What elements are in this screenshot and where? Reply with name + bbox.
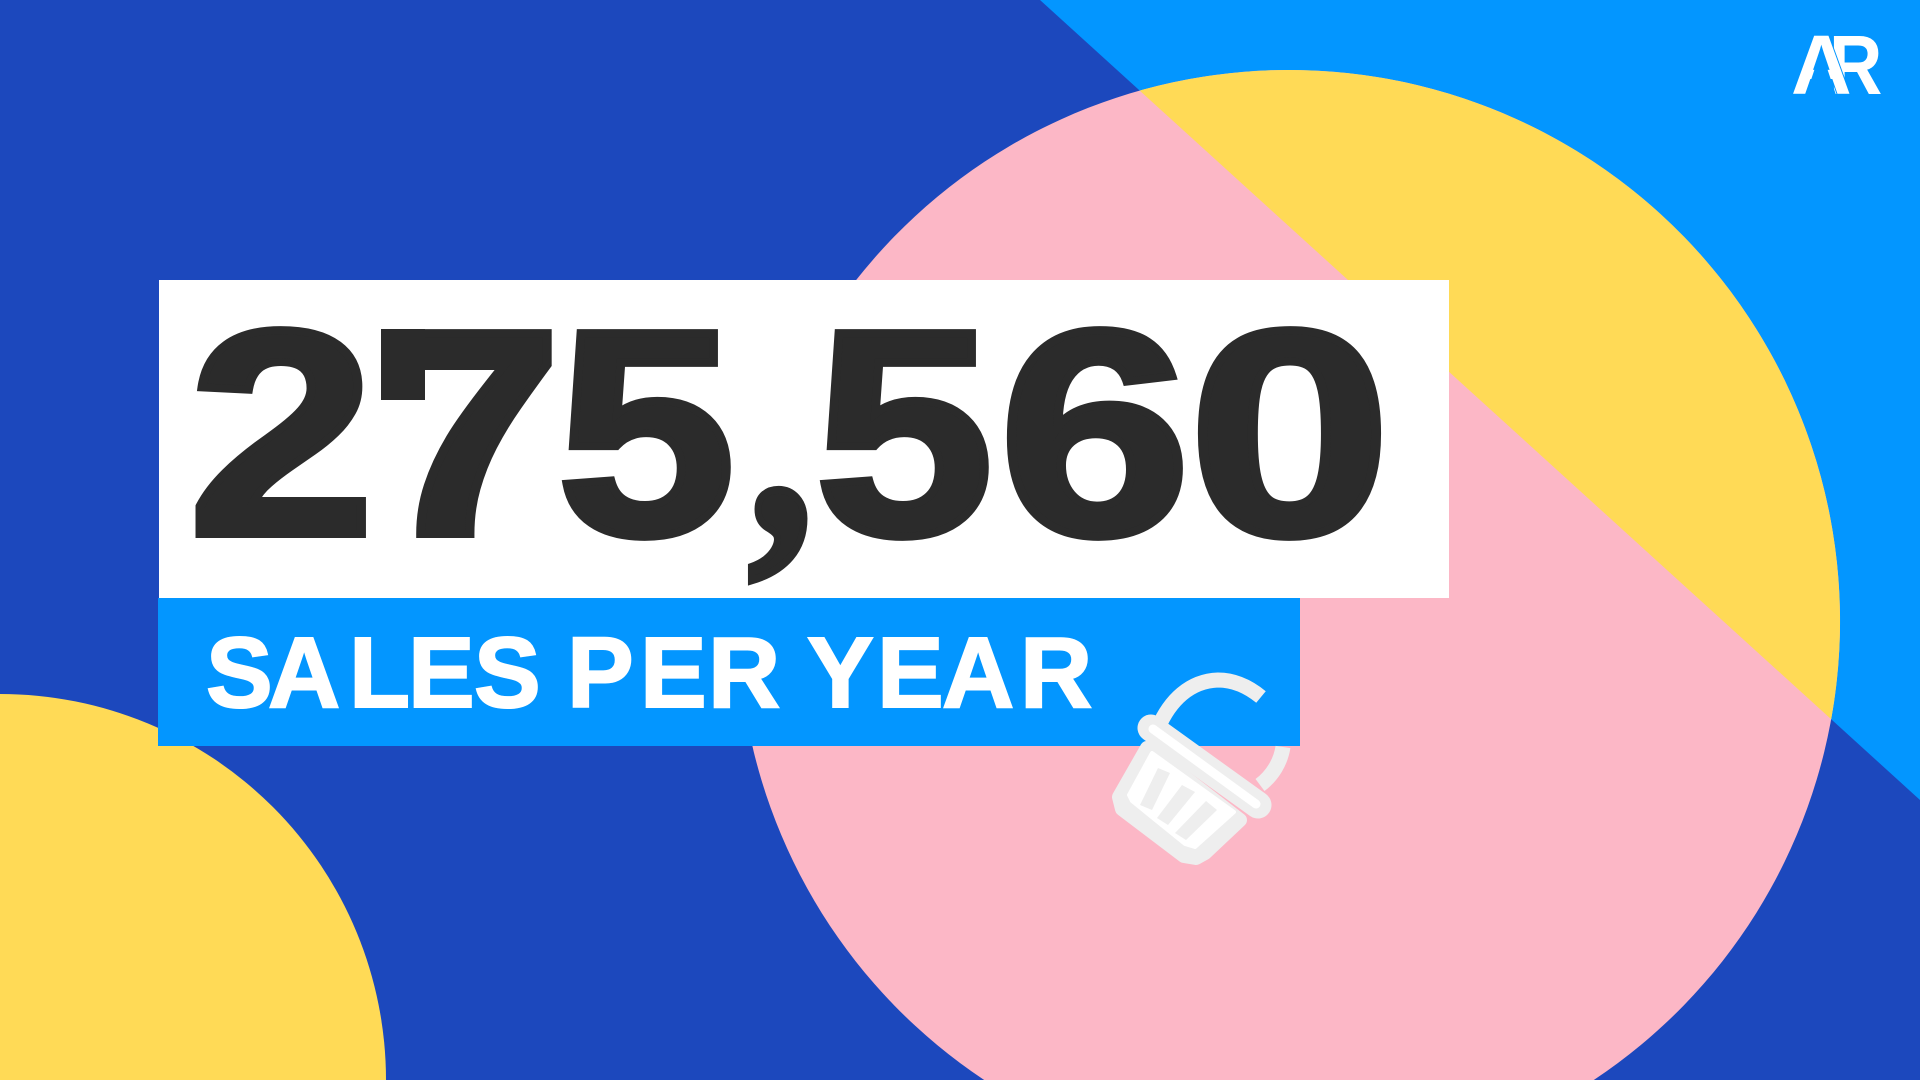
background: light blue triangle [1040,0,1920,800]
basket body [1119,748,1240,858]
big number: 6 [999,270,1191,596]
basket handle [1158,680,1283,785]
logo: AR: A [1791,18,1852,112]
yellow segment of large circle [1140,70,1840,719]
large pink circle [738,70,1840,1080]
big number [188,268,1391,600]
basket stripes [1140,768,1217,840]
panel: white number card [159,268,1449,600]
big number: 5 [557,269,735,596]
yellow circle bottom left [0,694,386,1080]
big number: 2 [188,270,375,596]
big number: 7 [372,270,562,596]
logo: AR: R [1829,18,1882,112]
big number: , [748,268,814,600]
big number: 5 [815,269,993,596]
logo: AR [1791,18,1882,112]
icon: shopping basket [1119,680,1283,858]
panel: blue label bar [158,598,1300,746]
big number: 0 [1188,269,1391,596]
basket rim [1151,728,1258,805]
label text: SALES PER YEAR [206,617,1092,729]
